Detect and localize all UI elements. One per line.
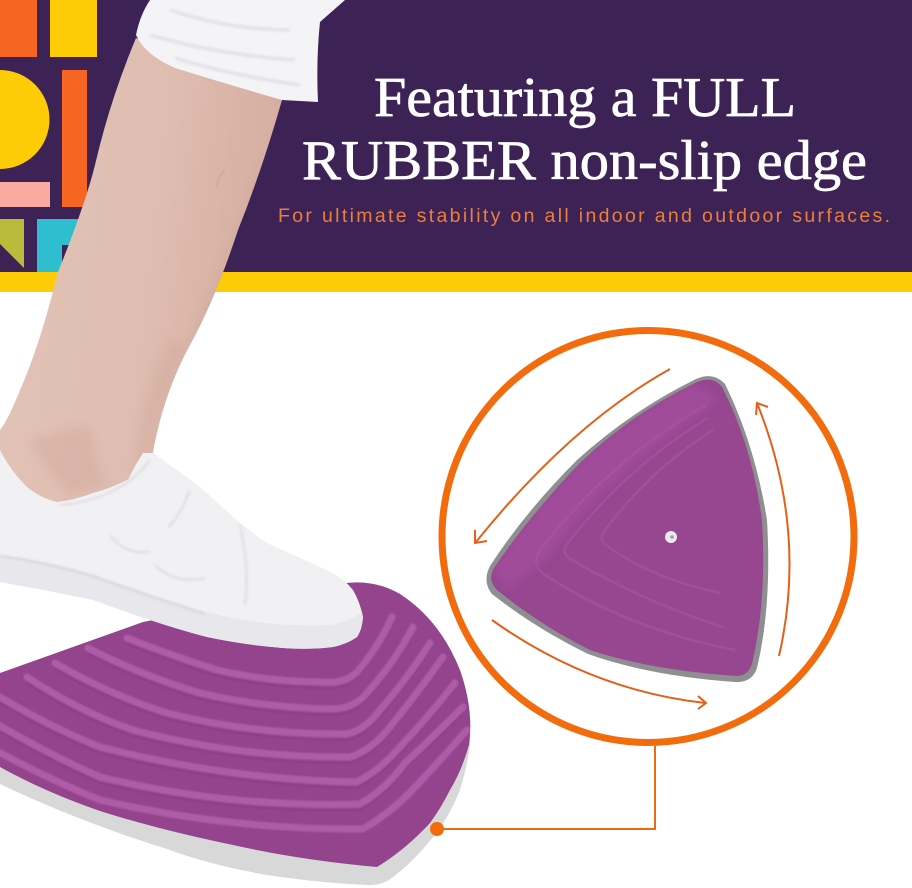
arrow: bottom edge bbox=[492, 620, 706, 709]
yellow band under banner bbox=[0, 272, 912, 292]
headline: Featuring a FULL bbox=[374, 67, 796, 129]
headline bbox=[302, 67, 867, 192]
banner: purple header bbox=[0, 0, 912, 272]
geometric pattern bbox=[0, 0, 97, 272]
photo: balance stone purple dome bbox=[0, 570, 480, 880]
product top view: triangle stone bbox=[486, 376, 768, 682]
circular callout ring bbox=[442, 330, 854, 742]
photo: white shoe bbox=[0, 450, 363, 649]
photo: leg bbox=[0, 38, 282, 510]
connector line with dot bbox=[430, 746, 655, 836]
arrow: left edge bbox=[475, 369, 670, 543]
photo: white shorts bbox=[136, 0, 345, 102]
headline: RUBBER non-slip edge bbox=[302, 130, 867, 192]
subheading: For ultimate stability on all indoor and outdoor surfaces. bbox=[278, 205, 890, 227]
arrow: right edge bbox=[756, 403, 790, 656]
photo: balance stone grey rubber edge bbox=[0, 730, 470, 885]
